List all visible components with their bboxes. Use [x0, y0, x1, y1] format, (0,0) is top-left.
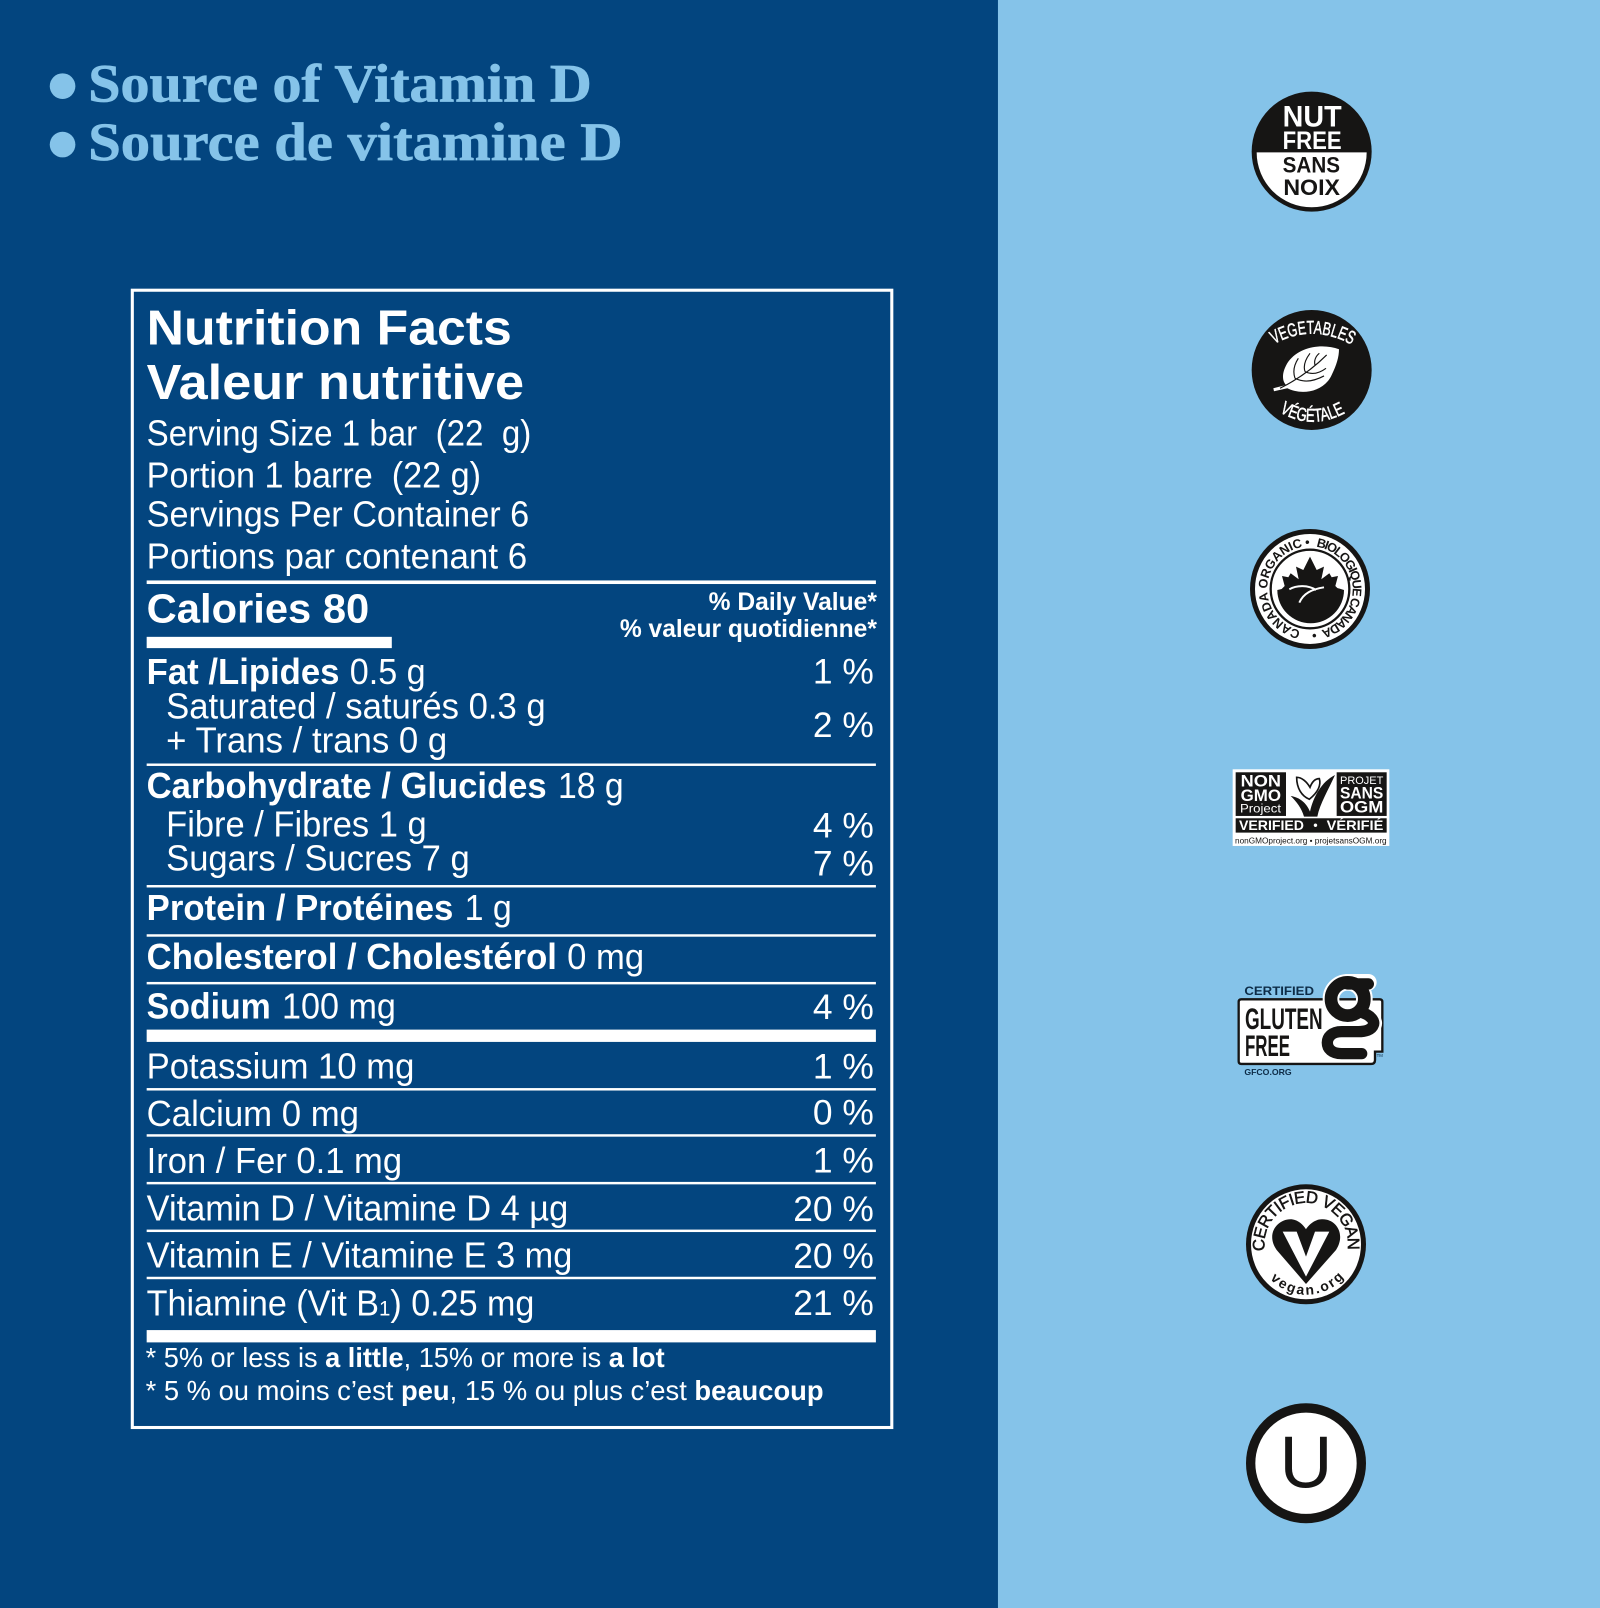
row: protein: Protein / Protéines [147, 888, 453, 928]
row: iron: 1 % [813, 1142, 874, 1181]
row: saturated and trans fat [166, 686, 874, 761]
icon: Non-GMO Project badge: GMO [1241, 786, 1281, 805]
row: fat [147, 652, 874, 692]
icon: Canada organic badge: BIOLOGIQUE CANADA [1317, 538, 1362, 638]
row: vitamin D: Vitamin D / Vitamine D 4 µg [147, 1188, 568, 1228]
icon: kosher U badge [1251, 1408, 1361, 1519]
row: carbohydrate: Carbohydrate / Glucides [147, 766, 547, 806]
row: fibre [166, 804, 874, 845]
row: thiamine: 21 % [793, 1284, 874, 1323]
icon: certified gluten free badge [1239, 982, 1383, 1077]
title: Nutrition Facts / Valeur nutritive: Nutrition Facts [147, 301, 512, 356]
footnote: English: * 5% or less is a little, 15% or more is a lot [146, 1342, 665, 1373]
row: cholesterol: 0 mg [567, 937, 644, 977]
icon: Canada organic badge: • [1312, 634, 1316, 638]
icon: vegetables leaf badge: VEGETABLES [1268, 320, 1356, 344]
row: sodium: 100 mg [282, 986, 396, 1026]
icon: certified gluten free badge: GLUTEN [1245, 1003, 1323, 1036]
row: fat: Fat /Lipides [147, 652, 339, 692]
row: carbohydrate: 18 g [558, 766, 624, 806]
row: vitamin D: 20 % [793, 1190, 874, 1229]
row: vitamin E [147, 1236, 874, 1276]
icon: vegetables leaf badge [1252, 310, 1372, 430]
row: iron [147, 1141, 874, 1181]
icon: Non-GMO Project badge [1233, 769, 1389, 846]
row: calcium: Calcium 0 mg [147, 1094, 359, 1134]
bullet: French claim [50, 132, 75, 157]
claim: Source de vitamine D: Source de vitamine D [88, 112, 623, 172]
icon: Non-GMO Project badge: Project [1240, 802, 1282, 816]
row: potassium [147, 1046, 874, 1086]
row: fat: 1 % [813, 653, 874, 692]
row: potassium: 1 % [813, 1047, 874, 1086]
icon: certified gluten free badge: GFCO.ORG [1244, 1067, 1292, 1077]
row: sodium: 4 % [813, 988, 874, 1027]
icon: Non-GMO Project badge: PROJET [1340, 775, 1383, 787]
row: fibre: Fibre / Fibres 1 g [166, 804, 427, 844]
icon: Canada organic badge: CANADA ORGANIC [1258, 539, 1302, 638]
serving information: Portions par contenant 6 [147, 537, 527, 577]
row: saturated and trans fat: Saturated / saturés 0.3 g [166, 686, 546, 726]
row: vitamin E: Vitamin E / Vitamine E 3 mg [147, 1236, 572, 1276]
calories row: Calories 80 [147, 585, 369, 631]
serving information: Servings Per Container 6 [147, 495, 529, 535]
icon: certified gluten free badge: TM [1377, 1053, 1383, 1058]
title: Nutrition Facts / Valeur nutritive [147, 301, 524, 410]
row: fat: 0.5 g [350, 652, 426, 692]
row: sugars: Sugars / Sucres 7 g [166, 839, 470, 879]
icon: Canada organic badge: • [1306, 540, 1310, 544]
claim: Source of Vitamin D: Source of Vitamin D [88, 54, 592, 114]
row: vitamin D [147, 1188, 874, 1229]
row: sugars [166, 839, 874, 883]
icon: Non-GMO Project badge: nonGMOproject.org • projetsansOGM.org [1235, 836, 1387, 845]
icon: Canada organic badge [1250, 529, 1370, 649]
icon: certified vegan badge: CERTIFIED VEGAN [1252, 1190, 1360, 1250]
row: iron: Iron / Fer 0.1 mg [147, 1141, 402, 1181]
serving information: Portion 1 barre (22 g) [147, 456, 481, 496]
icon: Non-GMO Project badge: VÉRIFIÉ [1327, 818, 1383, 833]
daily value header [620, 589, 877, 643]
row: sodium [147, 986, 874, 1027]
row: calcium [147, 1093, 874, 1134]
daily value header: % valeur quotidienne* [620, 616, 877, 643]
footnote: French: * 5 % ou moins c’est peu, 15 % ou plus c’est beaucoup [146, 1375, 824, 1406]
icon: Non-GMO Project badge: • [1313, 818, 1318, 832]
row: thiamine: Thiamine (Vit B1) 0.25 mg [147, 1284, 534, 1324]
serving information [147, 414, 531, 577]
row: protein: 1 g [465, 888, 512, 928]
row: cholesterol: Cholesterol / Cholestérol [147, 937, 557, 977]
icon: nut free badge: FREE [1283, 127, 1342, 155]
panel: nutrition facts table [132, 290, 892, 1428]
icon: certified gluten free badge: CERTIFIED [1244, 984, 1314, 998]
row: potassium: Potassium 10 mg [147, 1046, 414, 1086]
icon: Non-GMO Project badge: NON [1241, 772, 1281, 791]
row: thiamine [147, 1284, 874, 1324]
bullet: English claim [50, 73, 75, 99]
icon: kosher U badge: U [1280, 1422, 1332, 1504]
icon: nut free badge [1252, 92, 1372, 212]
row: calcium: 0 % [813, 1093, 874, 1132]
icon: nut free badge: SANS [1283, 153, 1340, 178]
table border [132, 290, 892, 1428]
row: saturated and trans fat: + Trans / trans 0 g [166, 721, 447, 761]
icon: Non-GMO Project badge: VERIFIED [1239, 818, 1304, 833]
panel: certification badges background [998, 0, 1600, 1608]
title: Nutrition Facts / Valeur nutritive: Valeur nutritive [147, 355, 524, 410]
icon: Non-GMO Project badge: SANS [1340, 784, 1383, 803]
row: vitamin E: 20 % [793, 1237, 874, 1276]
calories row [147, 585, 392, 648]
icon: nut free badge: NOIX [1283, 175, 1340, 200]
row: sugars: 7 % [813, 844, 874, 883]
icon: certified vegan badge [1246, 1184, 1366, 1304]
icon: certified gluten free badge: FREE [1245, 1030, 1290, 1063]
row: fibre: 4 % [813, 806, 874, 845]
row: saturated and trans fat: 2 % [813, 706, 874, 745]
icon: nut free badge: NUT [1283, 101, 1342, 134]
row: sodium: Sodium [147, 986, 271, 1026]
daily value header: % Daily Value* [709, 589, 877, 616]
icon: Non-GMO Project badge: OGM [1340, 798, 1383, 817]
heading: source of vitamin D claims [50, 54, 623, 172]
icon: vegetables leaf badge: VÉGÉTALE [1282, 400, 1345, 422]
serving information: Serving Size 1 bar (22 g) [147, 414, 531, 454]
icon: certified vegan badge: vegan.org [1272, 1273, 1344, 1295]
